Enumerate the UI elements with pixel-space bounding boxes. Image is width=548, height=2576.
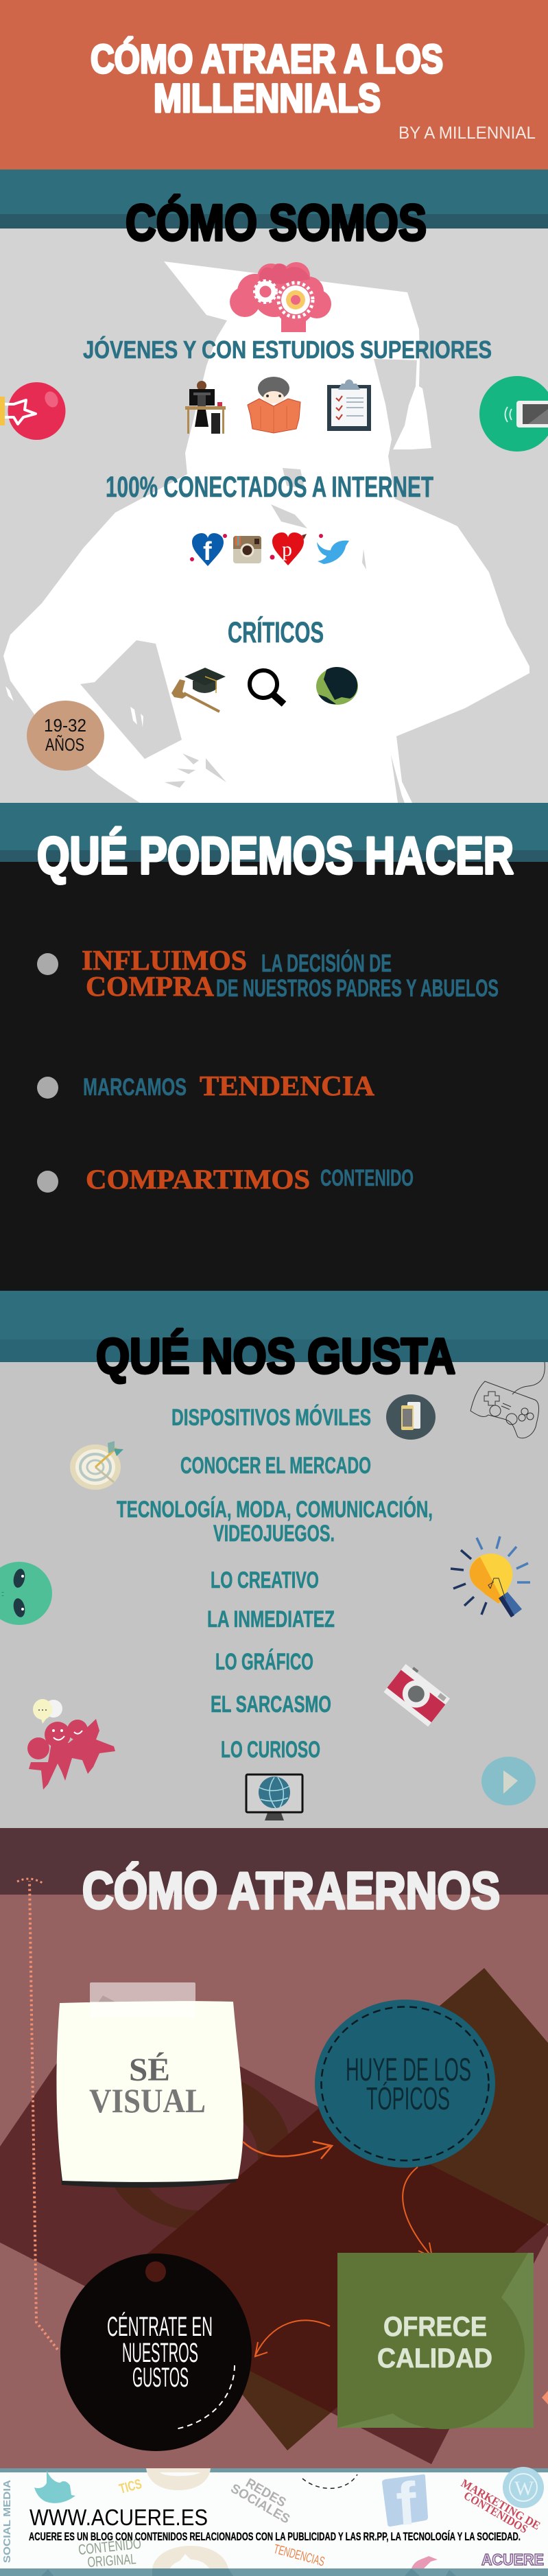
band shading xyxy=(41,2568,456,2576)
sticky note: sé visual: VISUAL xyxy=(89,2081,206,2120)
tag: céntrate en nuestros gustos: GUSTOS xyxy=(132,2363,189,2393)
list of likes xyxy=(117,1405,433,1763)
list of likes: LA INMEDIATEZ xyxy=(207,1606,335,1632)
age badge xyxy=(27,701,104,771)
icon: camera xyxy=(383,1662,452,1726)
tag: céntrate en nuestros gustos xyxy=(60,2253,252,2451)
bullet 1 xyxy=(37,944,499,1002)
tag: contenido original: ORIGINAL xyxy=(87,2551,136,2571)
icon: alien xyxy=(0,1562,52,1625)
tag: social media: SOCIAL MEDIA xyxy=(1,2480,13,2563)
bullet 2 xyxy=(37,1070,374,1101)
icon: twitter bird pale xyxy=(34,2470,75,2503)
sticky note: sé visual xyxy=(56,1982,243,2188)
arrow: note to ellipse xyxy=(243,2142,332,2159)
icon: mobile devices xyxy=(386,1394,436,1440)
icon: pinterest heart: p xyxy=(282,538,292,561)
list of likes: LO GRÁFICO xyxy=(215,1649,313,1675)
icon: red badge xyxy=(0,382,66,440)
icon: game controller xyxy=(470,1362,545,1438)
square: ofrece calidad: CALIDAD xyxy=(377,2343,492,2374)
list of likes: DISPOSITIVOS MÓVILES xyxy=(171,1405,371,1431)
tag: marketing de contenidos: CONTENIDOS xyxy=(462,2489,530,2536)
icon: pinterest heart xyxy=(270,532,307,565)
icon: instagram xyxy=(233,536,261,563)
subheading: críticos: CRÍTICOS xyxy=(228,616,324,649)
bullet 3: CONTENIDO xyxy=(320,1165,414,1191)
panel: qué podemos hacer xyxy=(0,803,548,1291)
ring: beige top xyxy=(146,2468,211,2490)
icon: facebook heart xyxy=(190,533,227,566)
tag: tics: TICS xyxy=(118,2477,143,2497)
bullet 1: INFLUIMOS xyxy=(82,944,247,976)
tassel xyxy=(393,357,431,449)
dotted arrow xyxy=(17,1879,58,2350)
icon: target with arrow xyxy=(70,1441,123,1490)
list of likes: CONOCER EL MERCADO xyxy=(180,1453,371,1479)
panel: header xyxy=(0,0,548,169)
panel: footer xyxy=(0,2467,548,2576)
tag: redes sociales: REDES xyxy=(243,2476,288,2510)
critic icons xyxy=(171,667,358,712)
byline: BY A MILLENNIAL xyxy=(398,124,536,143)
heading: qué nos gusta: QUÉ NOS GUSTA xyxy=(96,1329,455,1384)
texture flecks xyxy=(165,468,405,803)
panel: cómo atraernos xyxy=(0,1828,548,2468)
panel: qué nos gusta xyxy=(0,1291,548,1828)
bullet 3 xyxy=(37,1164,414,1195)
icon: friends chatting xyxy=(27,1699,115,1790)
icon: clipboard xyxy=(327,379,371,431)
age badge: 19-32 xyxy=(44,715,86,736)
bullet 2: TENDENCIA xyxy=(200,1070,374,1101)
icon: play button xyxy=(481,1757,536,1805)
bullet 3: COMPARTIMOS xyxy=(86,1164,310,1195)
icon: green badge with tablet xyxy=(479,376,548,452)
sticky note: sé visual: SÉ xyxy=(129,2052,170,2088)
age badge: AÑOS xyxy=(45,734,84,755)
website name: WWW.ACUERE.ES xyxy=(29,2505,208,2530)
icon: facebook tile: f xyxy=(394,2469,419,2538)
list of likes: LO CREATIVO xyxy=(211,1567,319,1593)
dashed arc xyxy=(302,2474,357,2488)
tag: contenido original: CONTENIDO xyxy=(78,2536,142,2558)
icon: twitter bird xyxy=(317,534,349,564)
icon: woman at desk xyxy=(185,381,226,434)
square: ofrece calidad xyxy=(337,2253,534,2429)
arrow: ellipse to square xyxy=(403,2167,432,2257)
social icons xyxy=(190,532,349,566)
title: CÓMO ATRAER A LOS xyxy=(91,37,443,82)
decorative footer icons xyxy=(34,2467,544,2576)
icon: boy reading xyxy=(248,377,300,433)
icon: brain with gears xyxy=(230,262,331,332)
tag: contenido original xyxy=(78,2536,142,2571)
graduate silhouette xyxy=(3,261,529,803)
background shapes xyxy=(0,1968,548,2464)
bullet 2: MARCAMOS xyxy=(83,1074,187,1101)
ring: beige bottom xyxy=(152,2546,228,2568)
icon: facebook tile xyxy=(382,2469,428,2538)
heading: cómo somos: CÓMO SOMOS xyxy=(126,194,427,251)
ellipse: huye de los tópicos: TÓPICOS xyxy=(366,2081,450,2116)
tag: redes sociales: SOCIALES xyxy=(228,2481,292,2527)
list of likes: VIDEOJUEGOS. xyxy=(213,1521,335,1547)
tag: marketing de contenidos: MARKETING DE xyxy=(459,2477,543,2532)
icon: globe xyxy=(316,667,358,705)
arrow: square to circle xyxy=(255,2320,330,2356)
icon: pink ribbon xyxy=(412,2556,438,2568)
ellipse: huye de los tópicos xyxy=(315,2000,495,2168)
icon: monitor with globe xyxy=(246,1775,302,1820)
square: ofrece calidad: OFRECE xyxy=(383,2312,487,2342)
icon: gavel xyxy=(171,679,219,712)
icon: graduation cap xyxy=(184,668,226,693)
list of likes: EL SARCASMO xyxy=(211,1691,331,1718)
logo: acuere: ACUERE xyxy=(481,2551,544,2568)
icon: wordpress circle xyxy=(503,2467,544,2508)
icon: light bulb xyxy=(451,1536,530,1617)
tag: céntrate en nuestros gustos: NUESTROS xyxy=(122,2338,198,2368)
icon: magnifying glass xyxy=(250,670,284,704)
bullet 1: COMPRA xyxy=(86,970,214,1002)
salmon arrowhead xyxy=(542,2391,548,2404)
title xyxy=(91,37,443,121)
list of likes: LO CURIOSO xyxy=(221,1737,320,1763)
panel: cómo somos xyxy=(0,169,548,803)
bullet 1: LA DECISIÓN DE xyxy=(261,948,392,977)
tag: céntrate en nuestros gustos: CÉNTRATE EN xyxy=(107,2311,213,2342)
title: MILLENNIALS xyxy=(154,76,381,121)
icon: wordpress circle: W xyxy=(514,2477,534,2500)
icon: facebook heart: f xyxy=(203,537,212,566)
